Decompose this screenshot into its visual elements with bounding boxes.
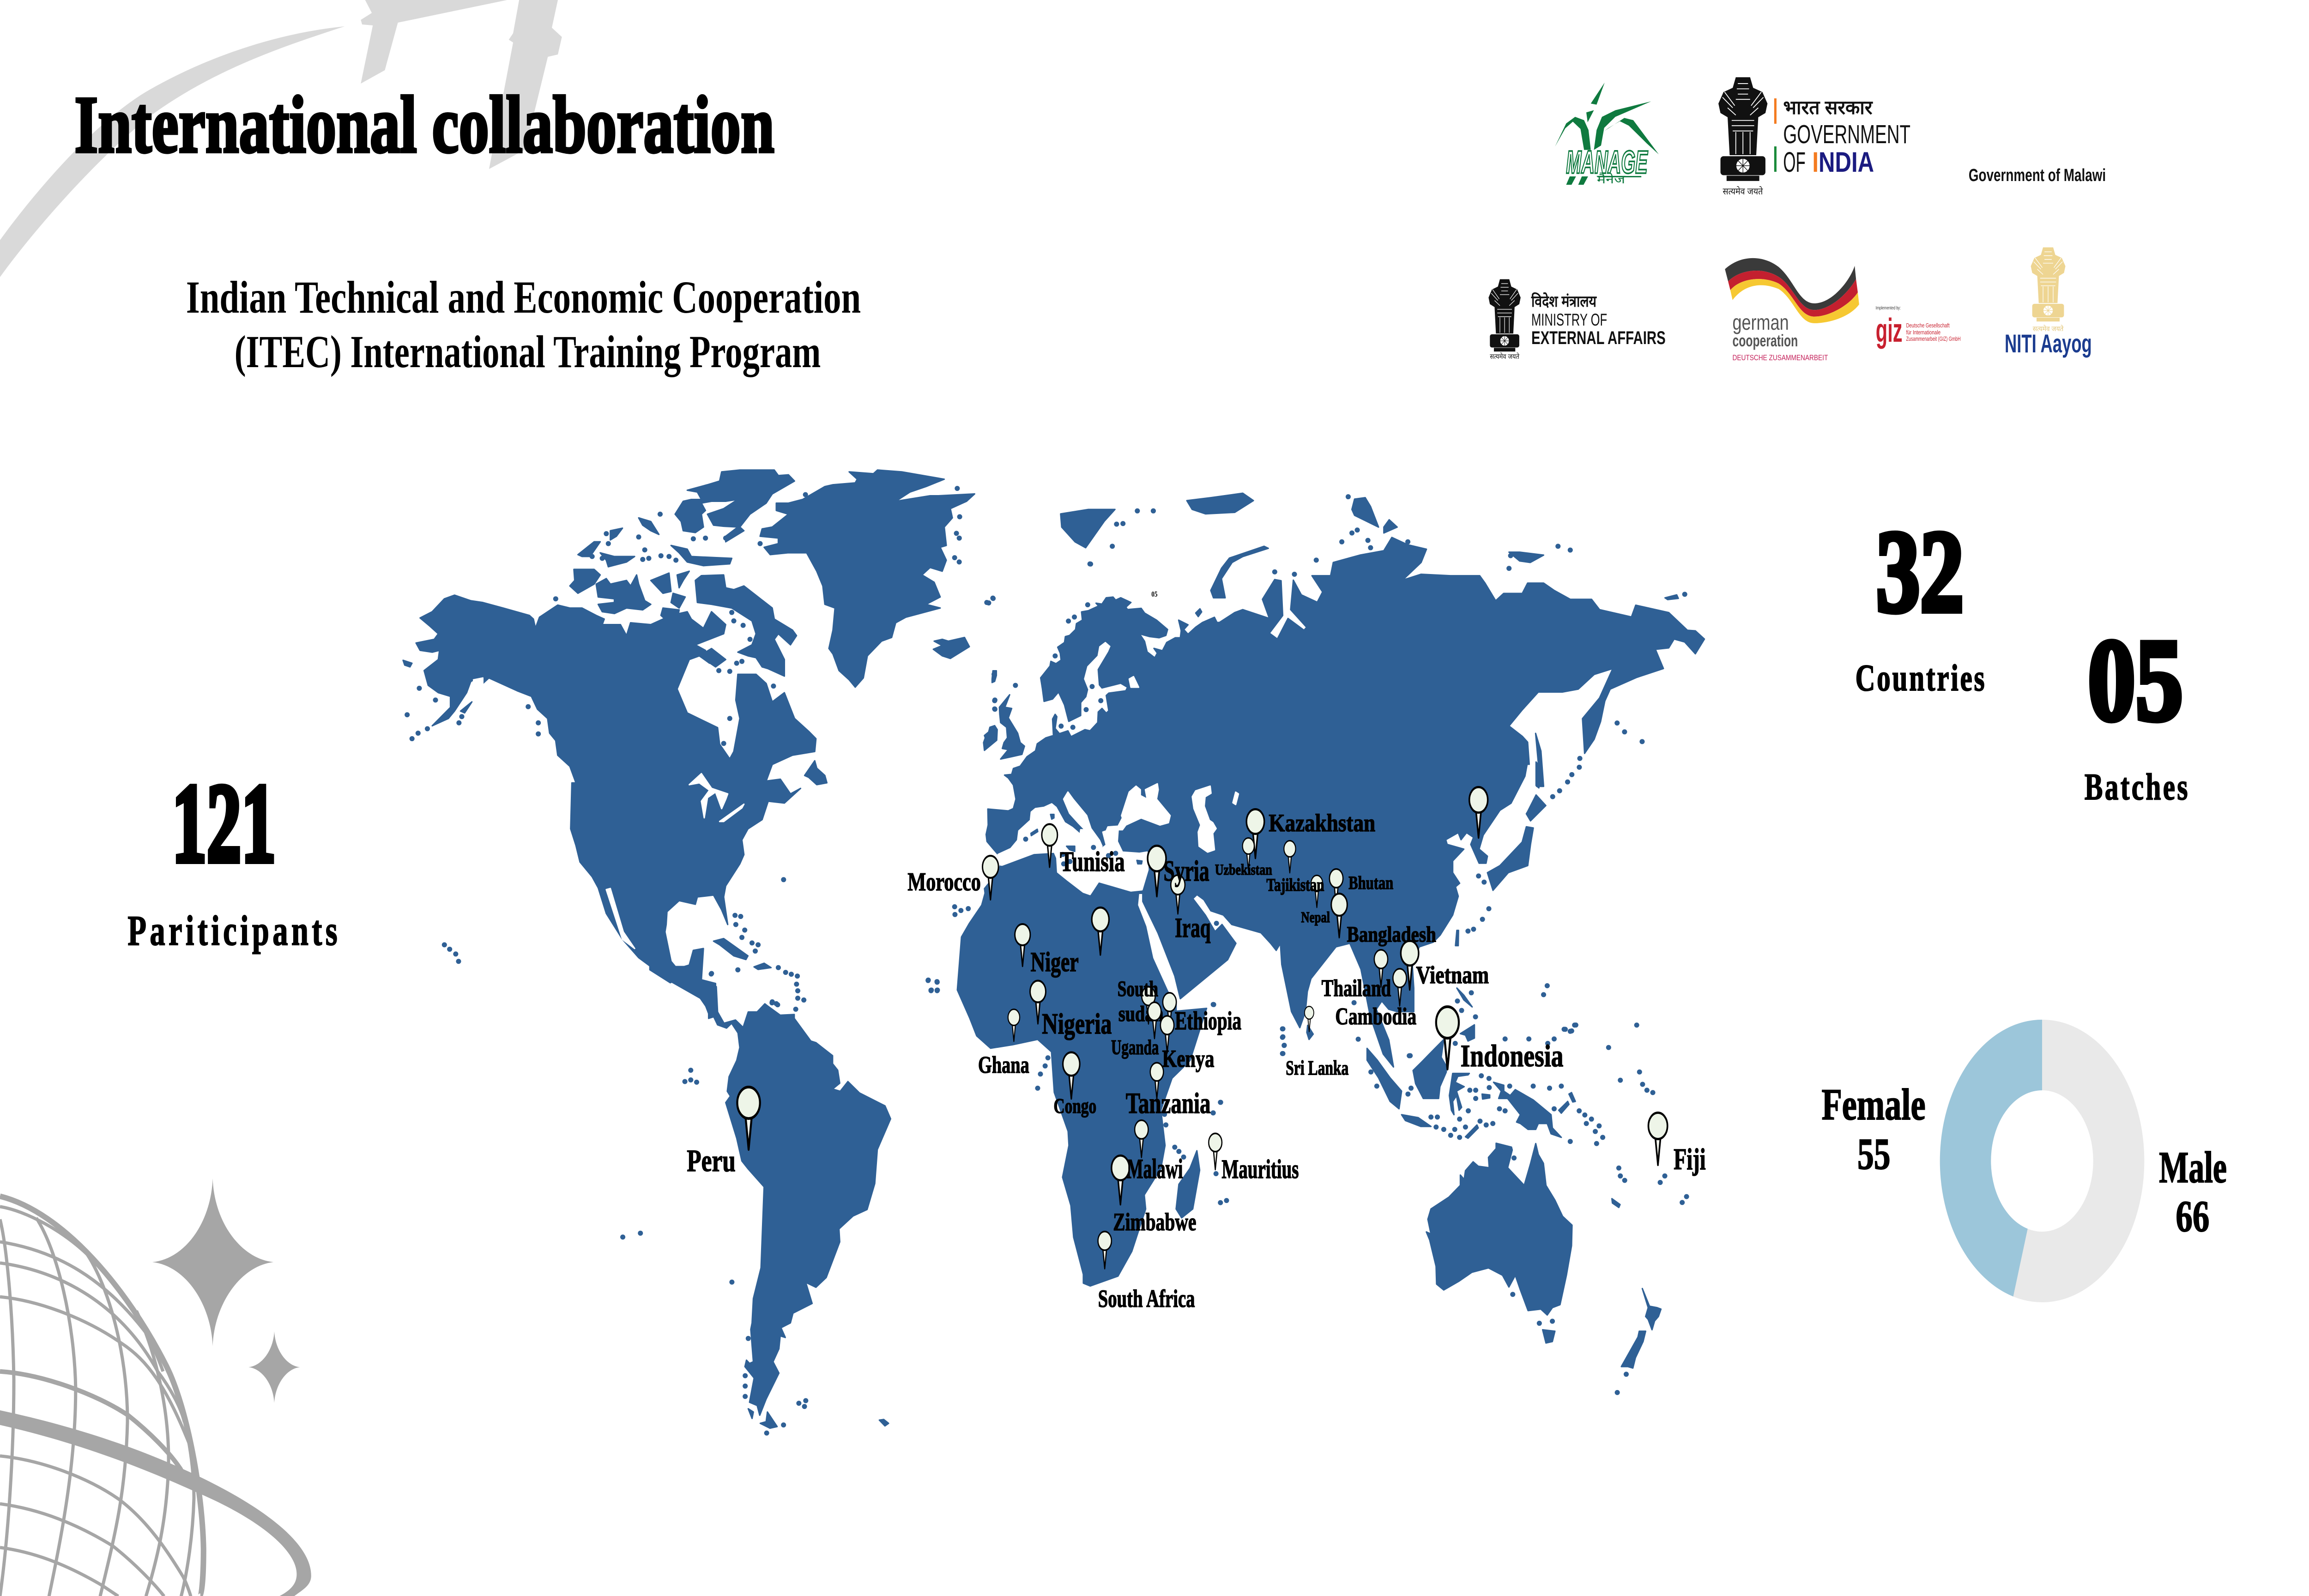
label: Mauritius: Mauritius [1221,1154,1299,1184]
label: Congo: Congo [1054,1094,1096,1118]
pin: Sudan [1092,907,1109,955]
logo: Government of India: GOVERNMENT [1783,119,1910,149]
logo: Government of Malawi: Government of Malawi [1969,166,2106,185]
label: Cambodia: Cambodia [1335,1003,1416,1029]
stat: 32 countries [1856,506,1985,699]
label: Tunisia: Tunisia [1060,846,1125,877]
pin: Ethiopia [1163,993,1176,1030]
landmass: South America [623,967,937,1433]
subtitle: Indian Technical and Economic Cooperation [186,272,861,323]
subtitle: (ITEC) International Training Program [235,326,821,377]
pin: Nigeria [1030,981,1046,1024]
landmass: Greenland [760,470,974,687]
Gulf of California and Great Lakes [473,678,744,949]
logo: German cooperation: DEUTSCHE ZUSAMMENARBEIT [1732,354,1828,363]
pin: Malawi [1135,1120,1148,1157]
logo: GIZ: für Internationale [1906,330,1940,336]
logo: Ministry of External Affairs: MINISTRY OF [1531,310,1607,329]
label: South Africa: South Africa [1098,1285,1195,1313]
pin: Sri Lanka [1305,1006,1314,1032]
title: International collaboration [74,80,774,170]
label: Niger: Niger [1031,947,1079,978]
Caribbean and Newfoundland islands [713,761,827,969]
label: Vietnam: Vietnam [1416,961,1489,989]
icon: small sparkle [248,1331,300,1403]
pin: South Sudan [1142,987,1155,1024]
label: Nigeria: Nigeria [1042,1008,1112,1040]
label: Uganda: Uganda [1111,1035,1159,1059]
label: Nepal: Nepal [1301,909,1330,926]
label: Female 55: Female [1822,1080,1926,1130]
logo: NITI Aayog: NITI Aayog [2005,330,2092,358]
seas: Mediterranean and Black Sea [998,784,1170,895]
New Zealand [1621,1331,1646,1368]
logo: German cooperation: cooperation [1732,332,1798,350]
label: Peru: Peru [687,1143,736,1178]
Australia [1427,1143,1572,1315]
decorative globe with ring [0,1196,311,1596]
label: Malawi: Malawi [1127,1154,1183,1185]
label: Sri Lanka: Sri Lanka [1286,1057,1348,1079]
decorative plane and swoosh [0,0,562,277]
logo: MANAGE [1555,83,1659,186]
logo: Government of India [1718,77,1910,197]
logo: Government of India: INDIA [1812,147,1874,178]
logo: German cooperation: german [1732,311,1789,334]
landmass: northern Asia [1061,493,1705,797]
pin: Bangladesh [1331,894,1347,937]
label: Tajikistan: Tajikistan [1266,876,1324,895]
world map [403,470,1705,1433]
logo: Government of India: OF [1783,147,1806,178]
subtitle [186,272,861,377]
logo: MANAGE: मैनेज [1597,172,1626,186]
label: South Sudan: sudan [1118,1002,1164,1026]
pin: Indonesia [1436,1007,1459,1069]
stat: 05 batches [2085,615,2188,808]
Arctic Eurasian islands [1061,493,1678,786]
Arctic islands [403,470,797,713]
label: Iraq: Iraq [1175,913,1211,943]
label: Thailand: Thailand [1322,975,1391,1001]
islands: UK, Ireland and Mediterranean [984,609,1202,864]
pin: Congo [1063,1052,1080,1099]
pin: Syria [1148,846,1166,896]
label: Bangladesh: Bangladesh [1347,923,1436,947]
label: Ethiopia: Ethiopia [1175,1006,1241,1035]
label: Tanzania: Tanzania [1126,1087,1211,1120]
logo: MANAGE: MANAGE [1566,144,1648,180]
Madagascar and Sri Lanka [1176,1151,1200,1218]
donut chart: gender split [1940,1020,2119,1297]
landmass: Europe [955,558,1220,914]
pin: Tajikistan [1284,841,1296,873]
logo: Ministry of External Affairs: सत्यमेव जयते [1490,352,1519,360]
label: Syria: Syria [1164,855,1209,888]
pin: Cambodia [1393,969,1407,1006]
pin: Morocco [983,856,998,900]
pin: Kazakhstan [1246,809,1264,858]
label: Ghana: Ghana [978,1052,1029,1078]
pin: Kenya [1161,1016,1174,1053]
stat: 121 participants: Pariticipants [127,907,338,955]
pin: South Africa [1098,1232,1112,1269]
pin: Tanzania [1150,1063,1163,1099]
seas: Caspian and Ladoga [1129,677,1216,852]
logo: NITI Aayog: सत्यमेव जयते [2033,325,2064,332]
logo: Government of India: भारत सरकार [1783,97,1874,118]
landmass: southern Asia [1143,761,1576,1113]
pin: East Asia [1469,787,1488,838]
label: Zimbabwe: Zimbabwe [1113,1209,1196,1236]
logo: GIZ: Deutsche Gesellschaft [1906,323,1950,329]
stat: 32 countries: Countries [1856,657,1985,699]
label: Male 66: Male [2159,1143,2227,1192]
pin: Fiji [1649,1112,1668,1165]
pin: Uzbekistan [1243,838,1254,870]
pin: Vietnam [1401,941,1419,990]
pin: Thailand [1374,950,1388,987]
landmass: North America [403,470,995,1016]
stat: 05 batches: Batches [2085,766,2188,808]
label: Kazakhstan: Kazakhstan [1269,810,1375,837]
logo: GIZ: giz [1876,312,1903,349]
label: Bhutan: Bhutan [1348,872,1393,893]
pin: Uganda [1148,1002,1161,1039]
pin: Iraq [1171,875,1185,914]
stat: 121 participants [127,761,338,955]
pin: Zimbabwe [1112,1155,1130,1204]
pin: Nepal [1311,876,1323,907]
Japan, Taiwan and Philippines [1456,762,1546,1007]
label: Fiji: Fiji [1674,1143,1706,1176]
label: Kenya: Kenya [1162,1046,1214,1073]
label: Male 66: 66 [2176,1192,2209,1241]
stat: 05 batches: 05 [2088,615,2183,745]
label: Male 66 [2159,1143,2227,1241]
logo: GIZ [1876,305,1961,349]
logo: GIZ: Zusammenarbeit (GIZ) GmbH [1906,336,1961,342]
pin: Tunisia [1042,824,1058,867]
stray 05: 05 [1151,590,1158,598]
icon: large sparkle [152,1179,273,1346]
logo: Ministry of External Affairs: विदेश मंत्रालय [1531,292,1597,310]
logo: Ministry of External Affairs [1488,279,1666,360]
stat: 121 participants: 121 [172,761,276,886]
pin: Ghana [1008,1010,1020,1041]
logo: Ministry of External Affairs: EXTERNAL AFFAIRS [1531,327,1666,348]
label: Morocco: Morocco [907,867,981,896]
label: Female 55: 55 [1857,1130,1891,1179]
landmass: Africa [928,850,1313,1286]
landmass: Oceania [1367,1025,1686,1392]
pin: Bhutan [1330,869,1343,906]
landmass: Iceland [933,637,969,659]
logo: Government of India: सत्यमेव जयते [1723,186,1763,197]
stat: 32 countries: 32 [1876,506,1964,636]
Aral Sea [1233,792,1239,804]
label: Female 55 [1822,1080,1926,1179]
pin: Mauritius [1209,1133,1222,1170]
pin: Niger [1015,924,1030,966]
logo: GIZ: Implemented by: [1876,305,1901,310]
label: South Sudan: South [1118,977,1158,1001]
logo: NITI Aayog [2005,248,2092,358]
pin: Peru [737,1087,760,1149]
label: Indonesia: Indonesia [1461,1038,1563,1073]
label: Uzbekistan: Uzbekistan [1215,861,1272,878]
logo: German cooperation [1725,258,1859,363]
